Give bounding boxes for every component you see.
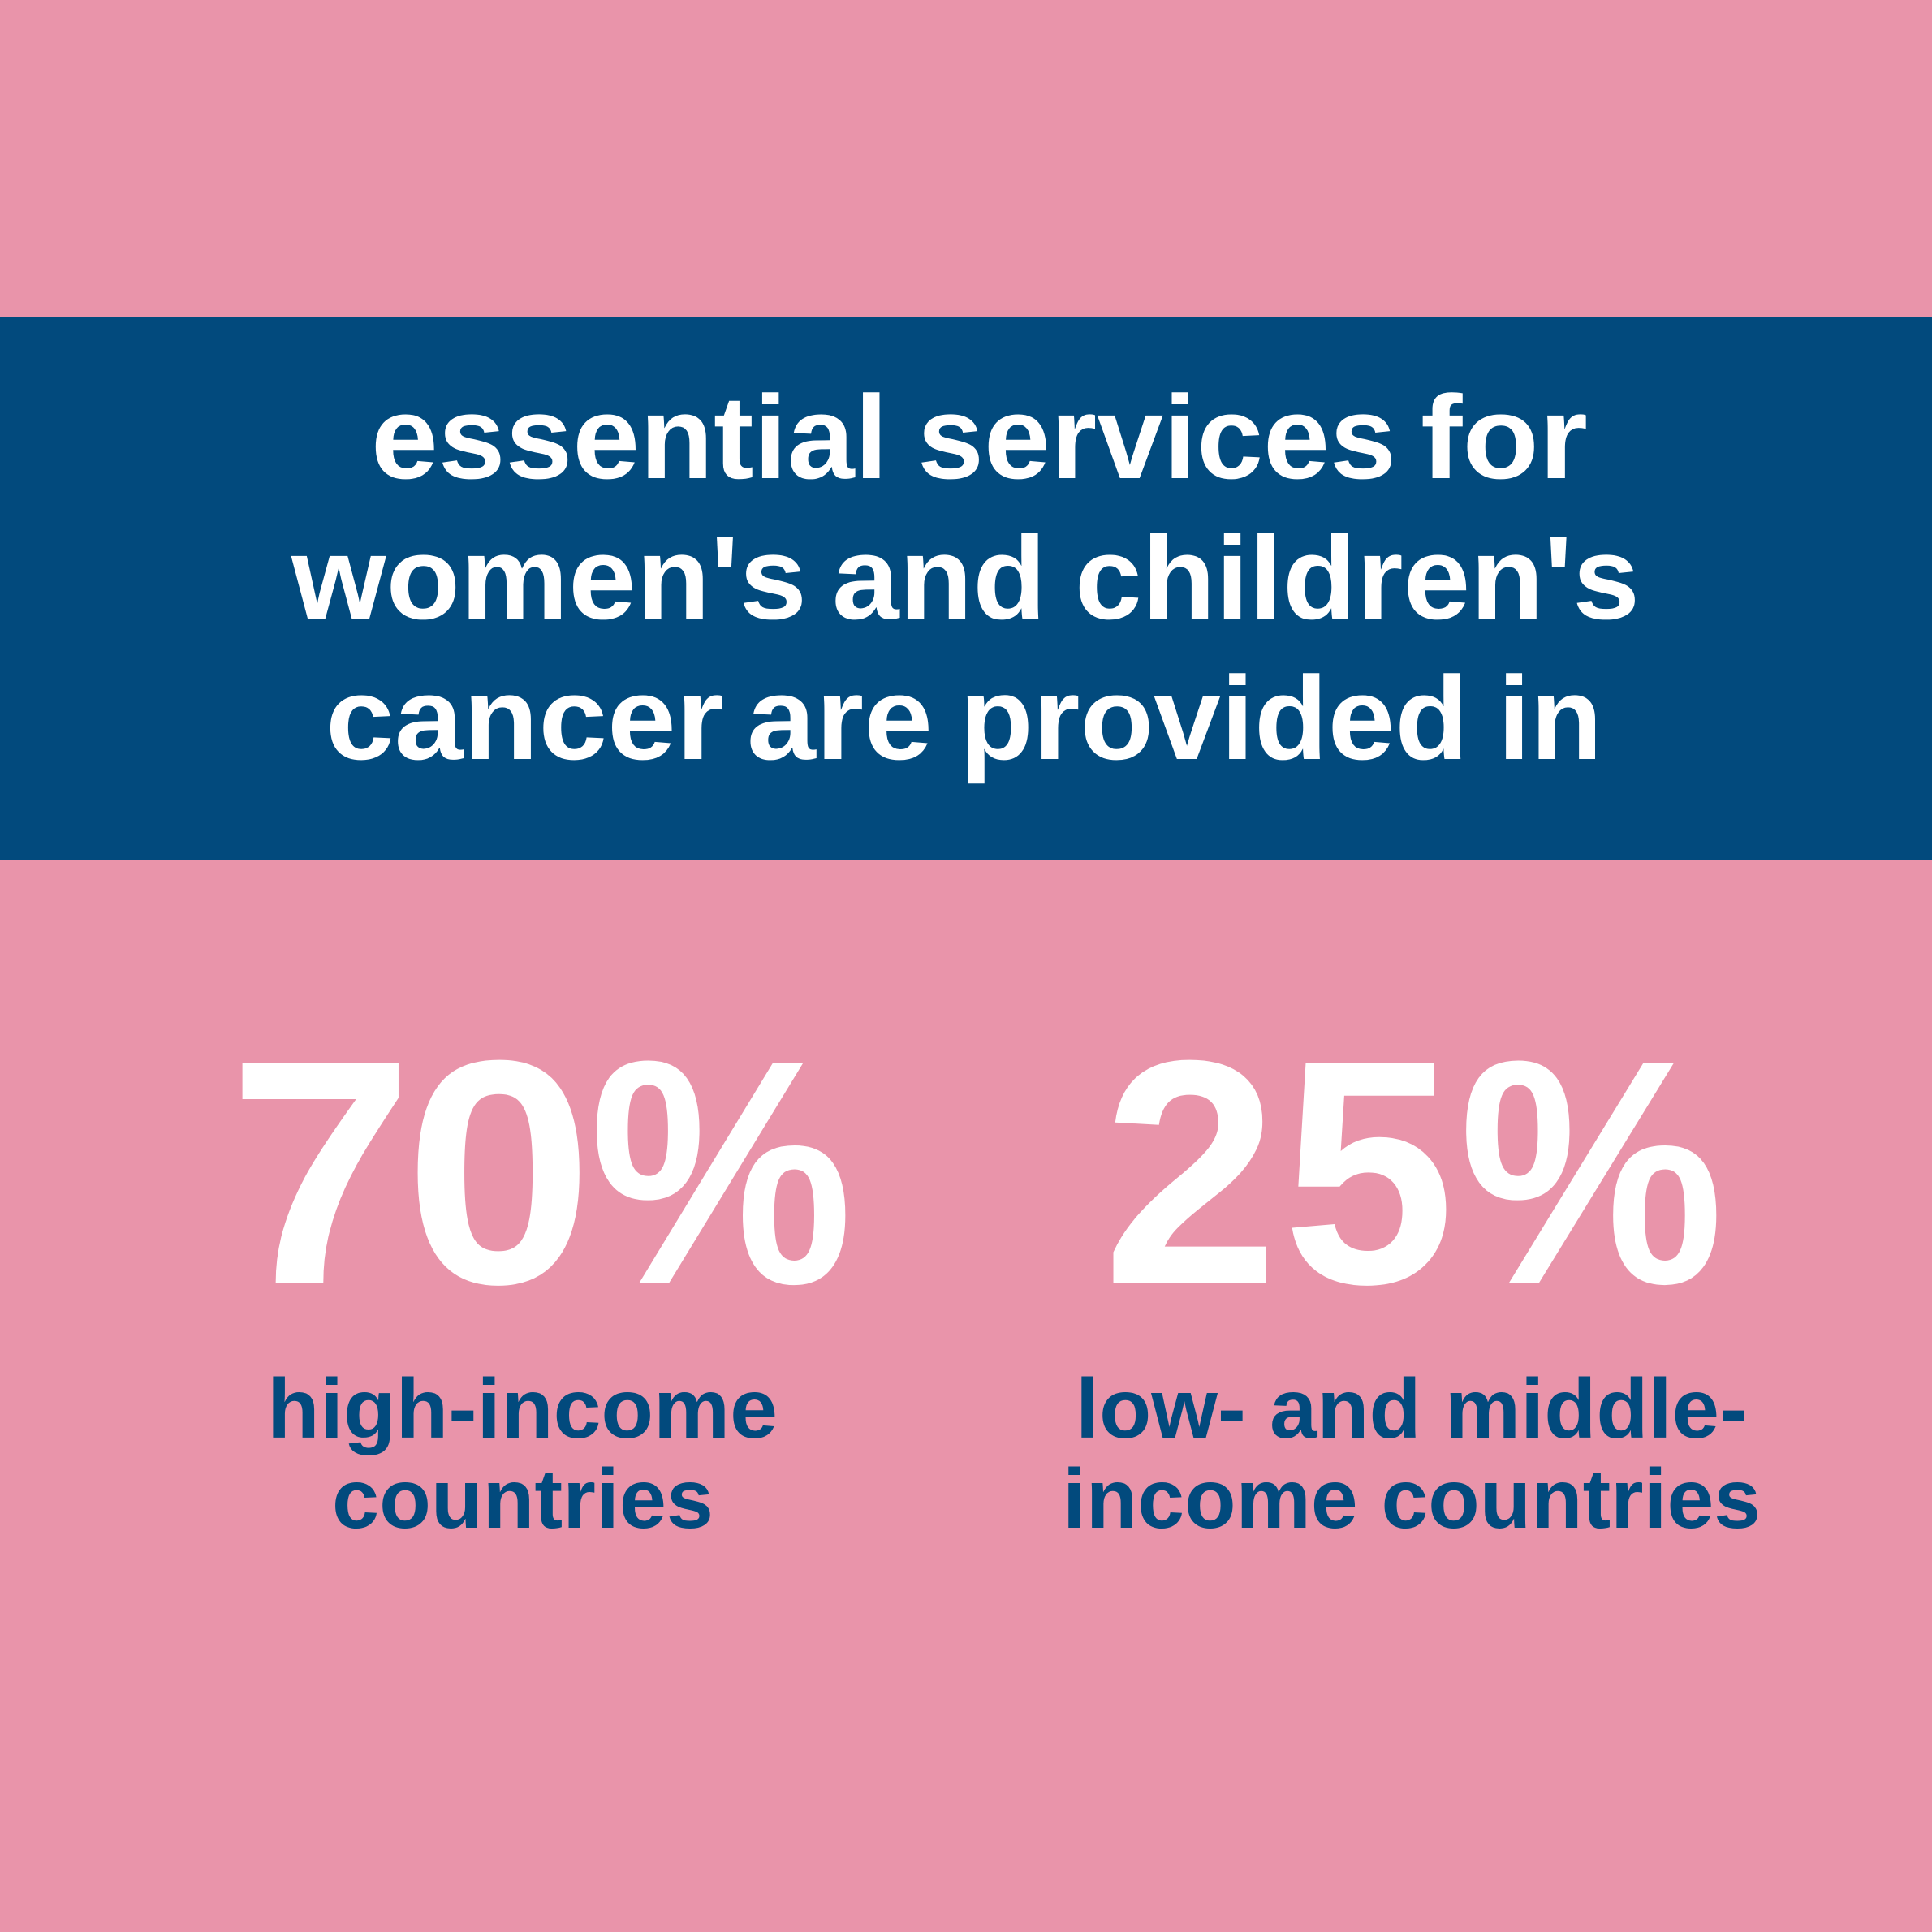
heading: women's (291, 511, 807, 644)
heading: for (1421, 371, 1588, 503)
heading: services (917, 371, 1396, 503)
heading: cancer (326, 652, 724, 784)
label: low- and middle-income countries: low- and middle- (1076, 1362, 1748, 1456)
label: high-income countries: high-income (267, 1362, 778, 1456)
statistic: 25 percent: % (1459, 994, 1724, 1351)
navy heading band (0, 317, 1932, 860)
statistic: 70 percent: % (589, 994, 853, 1351)
heading: children's (1075, 511, 1640, 644)
label: low- and middle-income countries: income countries (1063, 1452, 1761, 1546)
label: low- and middle-income countries (1063, 1362, 1761, 1546)
label: high-income countries (267, 1362, 778, 1546)
statistic: 25 percent (1102, 994, 1724, 1351)
statistic: 70 percent (228, 994, 853, 1351)
heading: provided (960, 652, 1468, 784)
statistic: 70 percent: 0 (404, 994, 593, 1351)
heading: in (1498, 652, 1602, 784)
heading (291, 371, 1640, 784)
statistic: 70 percent: 7 (228, 994, 413, 1351)
statistic: 25 percent: 5 (1283, 994, 1455, 1351)
heading: and (832, 511, 1046, 644)
heading: are (747, 652, 933, 784)
label: high-income countries: countries (332, 1452, 714, 1546)
statistic: 25 percent: 2 (1102, 994, 1279, 1351)
heading: essential (371, 371, 888, 503)
